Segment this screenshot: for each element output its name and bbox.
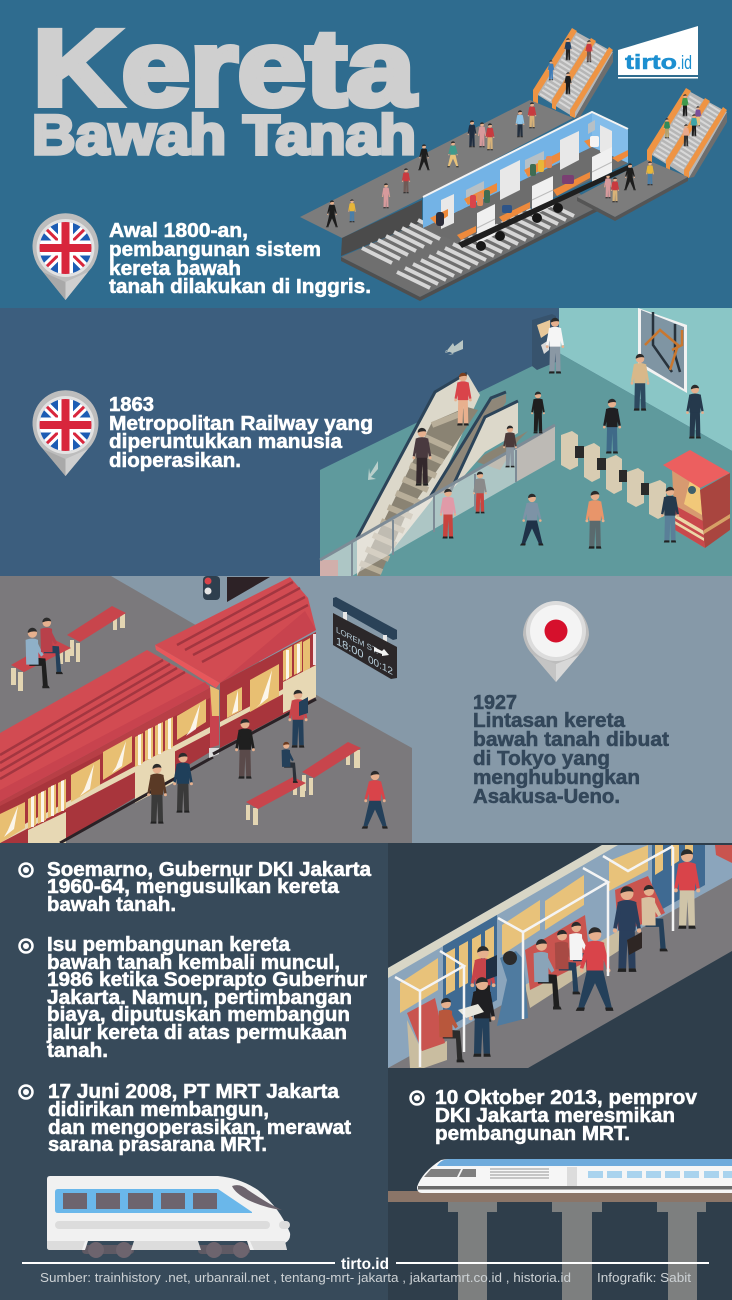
text block: 1927: Asakusa-Ueno. [473,786,620,808]
people on platform [26,618,388,829]
text block: 1863: diperuntukkan manusia [109,431,343,453]
ticket machine [532,314,556,370]
benches [11,606,361,825]
bullet item: 10 Oktober 2013: 10 Oktober 2013, pemprov [435,1087,698,1109]
text block: Awal 1800-an: kereta bawah [109,258,241,280]
station sign: 00:12 [368,654,393,678]
text block: 1927: 1927 [473,692,517,714]
panel: Inggris 1800 [0,0,732,308]
logo: tirto.id: tirto [625,52,677,74]
people in carriage [439,849,700,1062]
footer: credits [22,1256,709,1285]
bullet item: Isu pembangunan: 1986 ketika Soeprapto Gubernur [47,969,367,991]
logo: tirto.id [618,26,698,78]
bullet item: Soemarno: 1960-64, mengusulkan kereta [47,876,340,898]
train [0,577,316,843]
text block: 1863: 1863 [109,394,154,416]
illustration: elevated train [417,1159,732,1193]
bullet item: 17 Juni 2008: sarana prasarana MRT. [48,1134,267,1156]
text block: Awal 1800-an: Awal 1800-an, [109,220,248,242]
panel: Metropolitan Railway 1863 [0,308,732,576]
title: Kereta [33,7,416,128]
grab poles [395,846,673,1067]
map board [638,308,687,393]
bullet item: 10 Oktober 2013: DKI Jakarta meresmikan [435,1105,675,1127]
icon: Japan flag pin [523,601,589,682]
windows [400,845,648,1013]
escalators [320,373,555,576]
bullet item: Isu pembangunan: Jakarta. Namun, pertimbangan [47,987,352,1009]
illustration: train carriage interior [388,845,732,1068]
icon: UK flag pin [32,213,98,300]
illustration: elevated track [388,1191,732,1300]
panel: Tokyo 1927 [0,576,732,843]
footer: credits: tirto.id [341,1256,389,1273]
text block: 1927: Lintasan kereta [473,710,626,732]
footer: credits: Infografik: Sabit [597,1270,691,1285]
bullet item: Isu pembangunan: tanah. [47,1040,108,1062]
text block: 1927: menghubungkan [473,767,640,789]
text block: Awal 1800-an [109,220,371,298]
panel: Jakarta timeline (right) [388,843,732,1300]
bullet item: 17 Juni 2008: dan mengoperasikan, merawat [48,1117,351,1139]
footer: credits: Sumber: trainhistory .net, urbanrail.net , tentang-mrt- jakarta , jakartamrt.co.id , historia.id [40,1270,571,1285]
bullet item: Isu pembangunan: Isu pembangunan kereta [47,934,291,956]
traffic light [203,576,220,600]
logo: tirto.id: .id [677,53,692,74]
text block: Awal 1800-an: tanah dilakukan di Inggris. [109,276,371,298]
illustration: platform with red train [0,576,412,843]
bullet item: Isu pembangunan: jalur kereta di atas permukaan [46,1022,347,1044]
bullet item: Isu pembangunan: bawah tanah kembali muncul, [47,952,340,974]
illustration: white bullet train [47,1176,290,1258]
text block: 1927 [473,692,669,808]
seats [407,845,732,1068]
bullet item: 17 Juni 2008: didirikan membangun, [48,1099,269,1121]
text block: 1863: dioperasikan. [109,450,241,472]
station sign: 18:00 [336,635,364,662]
title [32,7,416,166]
text block: Awal 1800-an: pembangunan sistem [109,239,321,261]
icon: arrow [368,461,378,480]
text block: 1927: di Tokyo yang [473,748,610,770]
station sign [333,597,397,679]
bullet item: Isu pembangunan: biaya, diputuskan membangun [47,1004,350,1026]
bullet item: Isu pembangunan [20,934,367,1062]
text block: 1863: Metropolitan Railway yang [109,413,373,435]
panel: Jakarta timeline (left) [0,843,388,1300]
icon: UK flag pin [32,390,98,476]
bullet item: Soemarno [20,859,372,916]
doors [443,845,705,1030]
text block: 1863 [109,394,373,472]
bullet item: 10 Oktober 2013 [410,1087,698,1145]
bullet item: Soemarno: Soemarno, Gubernur DKI Jakarta [47,859,372,881]
people on platforms [326,38,701,227]
bullet item: 17 Juni 2008 [20,1081,351,1156]
icon: arrow [445,340,463,355]
bullet item: Soemarno: bawah tanah. [47,894,176,916]
people in hall [412,318,704,549]
illustration: subway station cutaway [300,28,727,301]
illustration: station hall [320,308,732,576]
title: Bawah Tanah [32,103,416,166]
train carriage interior [423,112,628,251]
bullet item: 17 Juni 2008: 17 Juni 2008, PT MRT Jakarta [48,1081,340,1103]
station sign: LOREM ST. [336,625,378,656]
ticket gates [561,431,666,519]
bullet item: 10 Oktober 2013: pembangunan MRT. [435,1123,630,1145]
ticket booth [663,450,730,548]
text block: 1927: bawah tanah dibuat [473,729,669,751]
